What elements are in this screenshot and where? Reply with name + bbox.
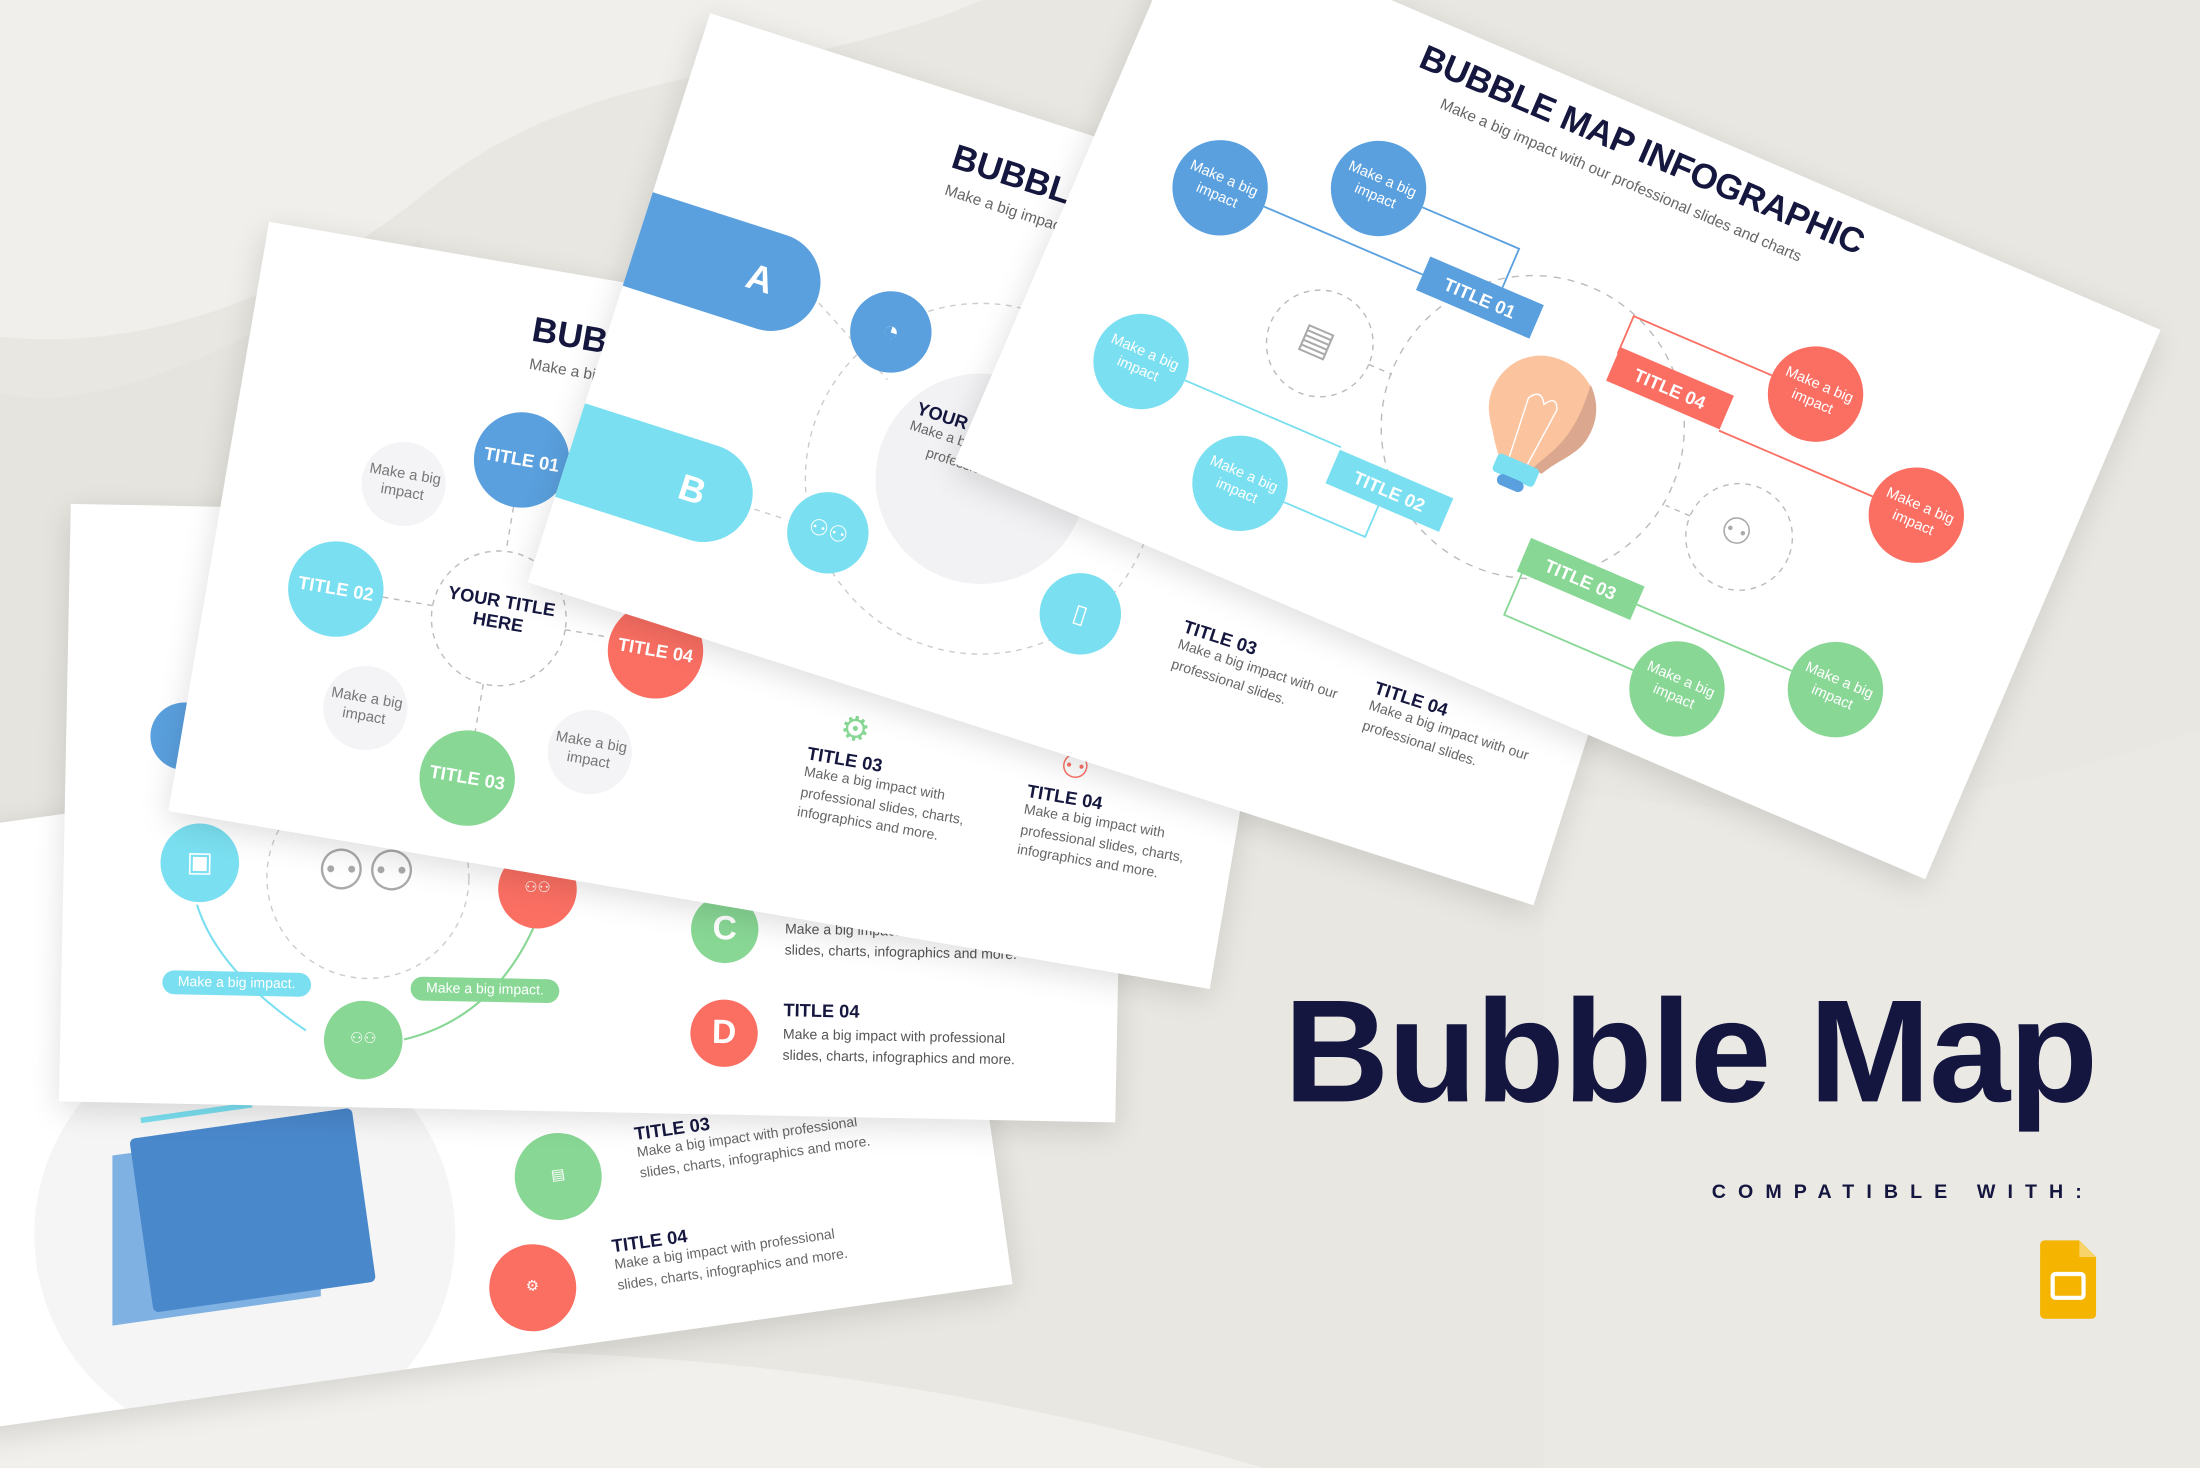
text TITLE 03: slides, charts, infographics and more.	[639, 1134, 871, 1181]
text TITLE 04: Make a big impact with our professional slides.	[1361, 698, 1530, 769]
label TITLE 03: TITLE 03	[1542, 554, 1620, 604]
label TITLE 03	[1517, 538, 1645, 620]
slide 4: Make a big impact with professional	[783, 1027, 1005, 1047]
slide 3: impact	[379, 480, 425, 504]
icon: blue circle: ▣	[186, 846, 213, 878]
folder illustration	[7, 997, 482, 1468]
blue bubbles: impact	[1194, 179, 1240, 212]
text TITLE 03: TITLE 03	[806, 743, 884, 776]
cyan bubbles: impact	[1114, 353, 1161, 386]
cyan bubbles: Make a big	[1109, 330, 1181, 374]
pill A	[583, 179, 833, 344]
center: HERE	[471, 607, 525, 636]
slide 1: front bubble map: impact	[1213, 475, 1260, 507]
slide 1: front bubble map: impact	[1352, 180, 1399, 213]
slide 3: Make a big	[368, 460, 442, 488]
title: BUBBLE MAP INFOGRAPHIC	[1414, 38, 1870, 263]
slide 2: ▯	[1070, 598, 1091, 629]
text TITLE 03: TITLE 03	[1181, 616, 1260, 659]
pill 2	[410, 976, 560, 1003]
text TITLE 04: Make a big impact with professional slides, charts, infographics and more.	[1016, 802, 1185, 882]
green bubbles: Make a big	[1644, 658, 1717, 702]
text TITLE 04: TITLE 04	[1372, 677, 1451, 720]
label TITLE 02: TITLE 02	[1350, 466, 1429, 515]
text TITLE 04: TITLE 04	[610, 1225, 689, 1257]
text TITLE 03: TITLE 03	[633, 1113, 711, 1144]
green bubbles: impact	[1650, 680, 1697, 713]
text TITLE 04: TITLE 04	[1026, 780, 1104, 814]
red bubbles	[1753, 331, 1878, 457]
text: compatible with: COMPATIBLE WITH:	[1712, 1180, 2094, 1202]
slide 3: Make a big	[555, 728, 628, 757]
text TITLE 04	[1016, 746, 1185, 882]
text TITLE 04	[610, 1225, 849, 1293]
slide 4	[59, 504, 1127, 1122]
icon: green: ⚇⚇	[350, 1031, 377, 1048]
text TITLE 03: Make a big impact with professional slides, charts, infographics and more.	[796, 765, 965, 844]
C item	[690, 895, 759, 964]
slide 2: ◔	[878, 314, 904, 349]
center text: Make a big impact with our professional slides.	[908, 418, 1071, 496]
slide 3: impact	[566, 748, 611, 772]
slide 1: front bubble map	[954, 0, 2161, 879]
slide 4: Make a big impact with professional	[785, 922, 1007, 942]
pill 1	[162, 970, 311, 997]
blue bubbles	[1157, 125, 1283, 250]
text TITLE 03	[633, 1113, 871, 1181]
text TITLE 03: Make a big impact with professional	[636, 1115, 858, 1161]
text TITLE 04: slides, charts, infographics and more.	[616, 1246, 849, 1293]
slide 3	[168, 222, 1310, 989]
label TITLE 04: TITLE 04	[1631, 364, 1709, 413]
label TITLE 01: TITLE 01	[1441, 273, 1519, 322]
icon: red	[497, 849, 578, 929]
icon: chat people: ⚇	[1713, 505, 1760, 557]
green bubbles	[1614, 626, 1740, 752]
pill B: B	[673, 465, 711, 513]
pill A: A	[741, 254, 779, 302]
cyan bubbles	[1078, 299, 1204, 424]
slide 3: TITLE 04	[616, 633, 695, 667]
icon: red: ⚇⚇	[524, 880, 551, 897]
title: BUBBLE MAP INFOGRAPHIC	[529, 310, 1017, 431]
icon: green: ▤	[550, 1166, 566, 1185]
text TITLE 04: Make a big impact with professional	[614, 1227, 836, 1273]
slide 4: slides, charts, infographics and more.	[782, 1048, 1015, 1068]
text TITLE 03: ⚙	[837, 709, 873, 751]
D item	[690, 999, 758, 1068]
subtitle: Make a big impact with our professional slides and charts	[1438, 96, 1804, 266]
pill B	[515, 390, 765, 555]
slide 1: front bubble map: impact	[1809, 681, 1855, 714]
title: BUBBLE MAP INFOGRAPHIC	[947, 137, 1424, 324]
slide 2: ⚇⚇	[805, 515, 851, 550]
slide 3: TITLE 03	[428, 760, 507, 794]
slide 3: Make a big	[330, 684, 404, 713]
slide 3: TITLE 02	[297, 571, 375, 605]
label TITLE 04	[1606, 347, 1734, 429]
text TITLE 03	[796, 709, 965, 844]
connector lines and dashed circles	[1184, 206, 1873, 672]
text TITLE 03: Make a big impact with our professional slides.	[1169, 637, 1339, 708]
label TITLE 01	[1416, 256, 1544, 339]
slide 3: impact	[341, 704, 387, 728]
slide 2	[528, 13, 1716, 905]
icon: red: ⚙	[525, 1278, 540, 1296]
slide 4: TITLE 04	[783, 999, 860, 1022]
pill 2: Make a big impact.	[426, 981, 544, 999]
center: YOUR TITLE	[447, 582, 557, 621]
label TITLE 02	[1325, 450, 1453, 532]
slide 2: Make a big impact with our professional slides and charts	[943, 182, 1320, 318]
slide 3: TITLE 01	[482, 442, 561, 476]
slide 1: front bubble map: Make a big	[1803, 659, 1876, 702]
slide 1: front bubble map: Make a big	[1884, 484, 1957, 528]
slide 1: front bubble map: impact	[1890, 507, 1936, 539]
blue bubbles: Make a big	[1188, 157, 1260, 201]
icon: green	[323, 1000, 403, 1080]
D item: D	[712, 1013, 737, 1052]
icon: blue circle	[157, 820, 243, 906]
red bubbles: Make a big	[1783, 363, 1856, 407]
slide 1: front bubble map: Make a big	[1208, 452, 1280, 496]
text TITLE 04: ⚇	[1057, 746, 1093, 789]
icon: people: ⚇⚇	[316, 840, 417, 904]
icon: green	[509, 1127, 607, 1226]
slide 1: front bubble map: Make a big	[1346, 157, 1419, 201]
slide 3: Make a big impact with our professional slides and charts	[528, 356, 916, 439]
slide 5: bottom slide	[0, 692, 1013, 1431]
pill 1: Make a big impact.	[178, 975, 296, 992]
slide 4: slides, charts, infographics and more.	[785, 943, 1017, 963]
lightbulb	[1468, 340, 1612, 487]
C item: C	[712, 910, 737, 948]
center text: YOUR TITLE HERE	[914, 398, 1077, 468]
icon: red	[484, 1239, 582, 1337]
icon: google slides	[2040, 1240, 2096, 1319]
red bubbles: impact	[1789, 386, 1835, 418]
icon: document: ▤	[1293, 313, 1342, 366]
heading: Bubble Map: Bubble Map	[1284, 971, 2097, 1134]
